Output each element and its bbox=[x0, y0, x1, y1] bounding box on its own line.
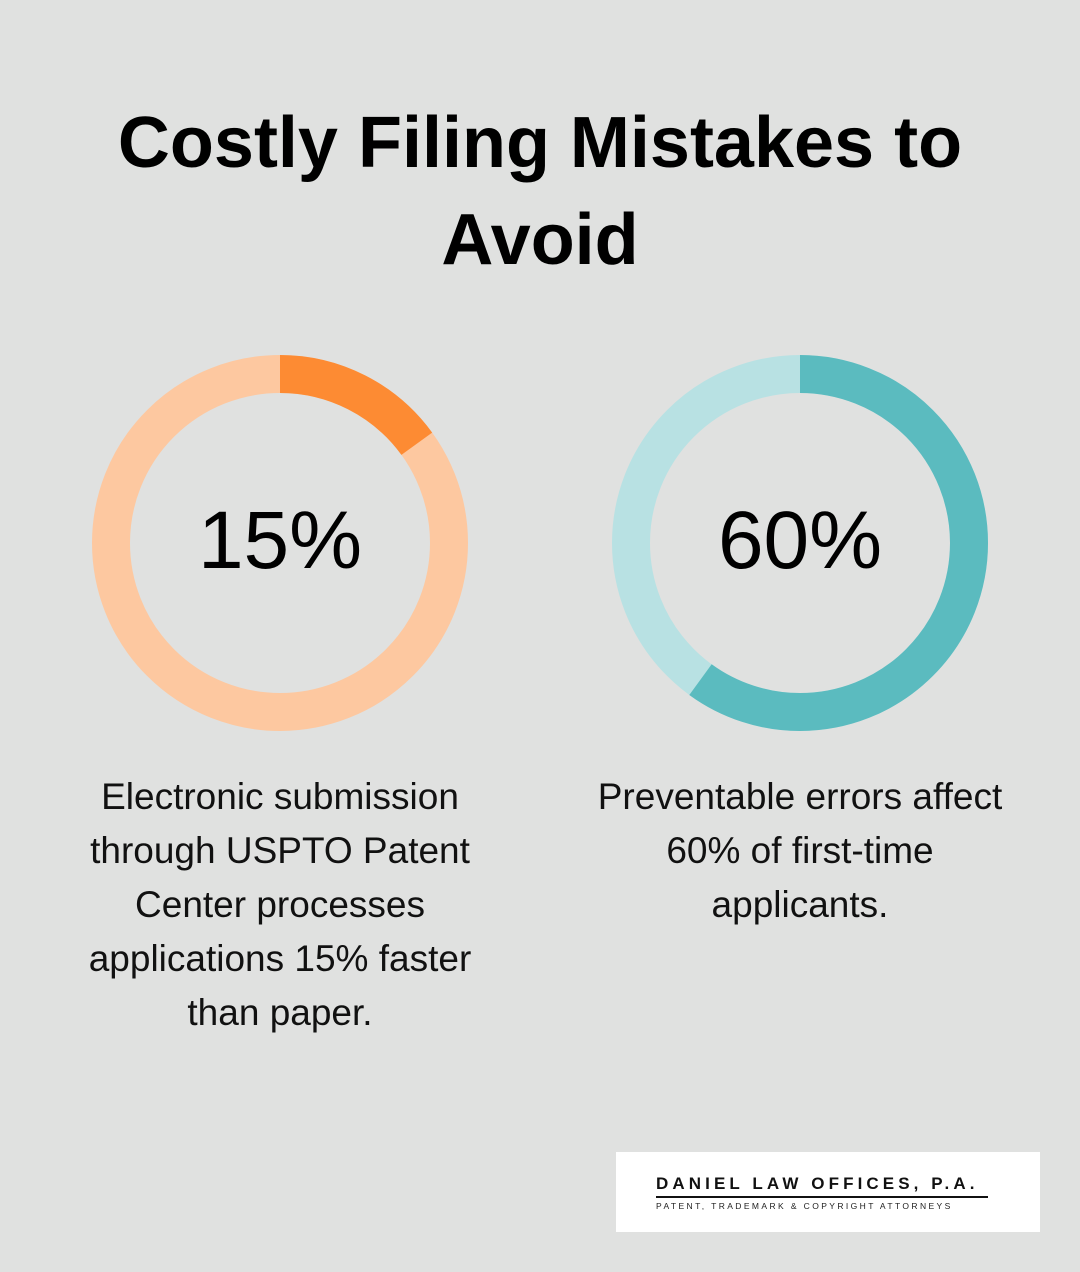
text: right description: applicants. bbox=[712, 884, 888, 925]
donut chart: 15%: 15% bbox=[198, 495, 362, 586]
text: right description: 60% of first-time bbox=[666, 830, 934, 871]
donut chart: 60% bbox=[612, 355, 988, 731]
donut chart: 60%: 60% bbox=[718, 495, 882, 586]
title bbox=[118, 103, 962, 280]
donut chart: 15% bbox=[92, 355, 468, 731]
text: left description: Electronic submission through USPTO Patent Center processes applications 15% faster than paper. bbox=[89, 776, 471, 1033]
logo bbox=[616, 1152, 1040, 1232]
title: Costly Filing Mistakes to bbox=[118, 103, 962, 183]
text: right description bbox=[598, 776, 1002, 925]
logo: PATENT, TRADEMARK & COPYRIGHT ATTORNEYS bbox=[656, 1201, 953, 1211]
logo: DANIEL LAW OFFICES, P.A. bbox=[656, 1174, 979, 1193]
title: Avoid bbox=[441, 200, 639, 280]
text: right description: Preventable errors affect bbox=[598, 776, 1002, 817]
